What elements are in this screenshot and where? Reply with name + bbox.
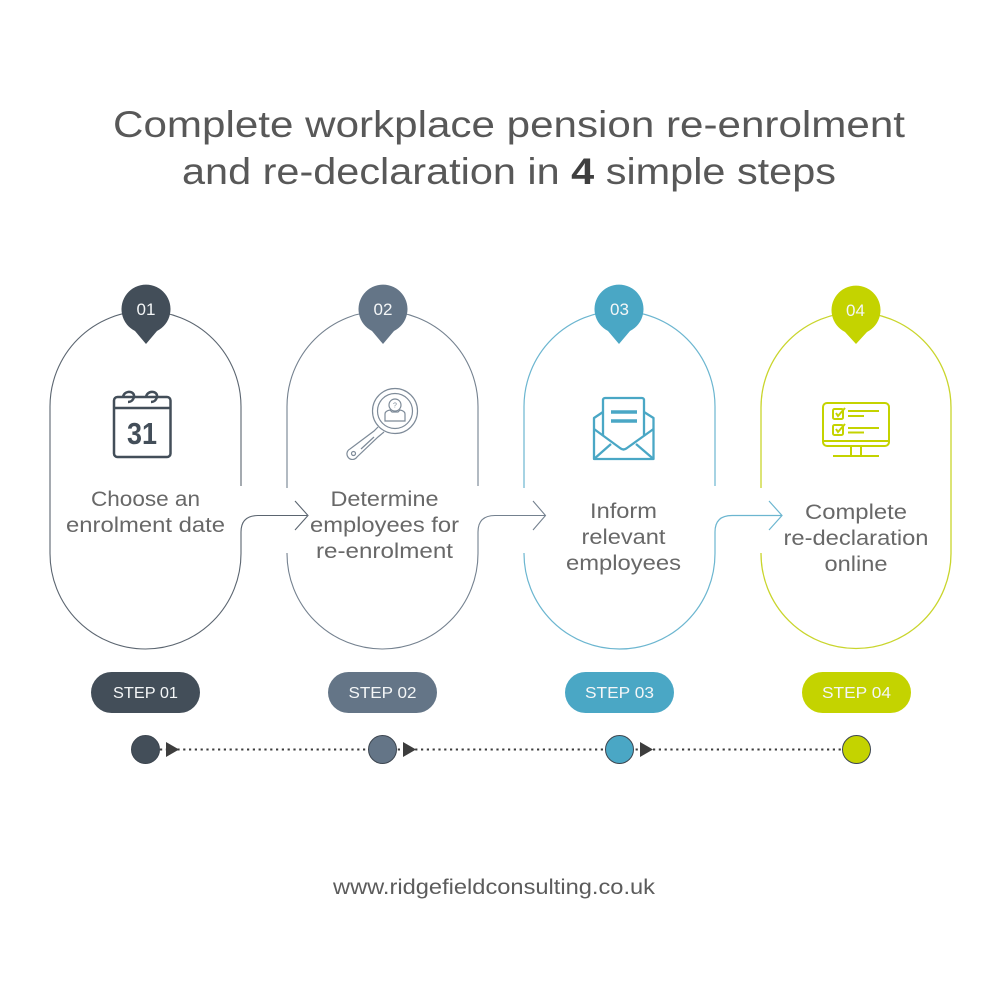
step 3 badge: 03	[610, 300, 629, 319]
step pill 04: STEP 04	[822, 685, 891, 702]
icon: calendar: 31	[127, 416, 157, 451]
timeline node 2	[368, 736, 396, 764]
step 2 label: Determine	[330, 488, 438, 511]
step 1 label	[66, 488, 225, 537]
timeline arrow 2	[403, 742, 416, 757]
step 4 badge: 04	[846, 301, 865, 320]
step 2 badge	[358, 285, 408, 344]
step 4 outline	[761, 313, 951, 648]
step 3 label: relevant	[582, 526, 666, 549]
step 2 label: re-enrolment	[316, 540, 453, 563]
step 4 label	[784, 501, 928, 576]
step pill 01	[91, 672, 200, 713]
step 1 label: enrolment date	[66, 514, 225, 537]
step 2 label	[310, 488, 459, 563]
panel: step 1	[50, 285, 308, 649]
step pill 02	[328, 672, 437, 713]
website url: www.ridgefieldconsulting.co.uk	[332, 876, 656, 899]
step 1 label: Choose an	[91, 488, 200, 511]
step 2 badge: 02	[374, 300, 392, 319]
icon: magnifier with person	[347, 388, 418, 459]
timeline arrow 1	[166, 742, 179, 757]
step 3 badge	[594, 285, 643, 344]
step 3 label: Inform	[590, 500, 657, 523]
timeline node 1	[132, 736, 160, 764]
step pill 04	[802, 672, 911, 713]
icon: envelope with letter	[594, 398, 654, 459]
title: and re-declaration in 4 simple steps	[182, 151, 836, 192]
step pill 02: STEP 02	[348, 685, 416, 702]
panel: step 4	[761, 286, 951, 648]
step 4 badge	[831, 286, 880, 344]
step pill 03: STEP 03	[585, 685, 654, 702]
step 4 label: re-declaration	[784, 527, 928, 550]
timeline arrow 3	[640, 742, 653, 757]
timeline node 4	[842, 736, 870, 764]
step pill 01: STEP 01	[113, 685, 178, 702]
step 2 label: employees for	[310, 514, 459, 537]
title: Complete workplace pension re-enrolment	[113, 104, 906, 145]
step 3 label	[566, 500, 681, 575]
step pill 03	[565, 672, 674, 713]
timeline	[132, 736, 870, 764]
step 3 outline and arrow	[524, 311, 782, 649]
panel: step 2	[287, 285, 546, 649]
step 1 outline and arrow	[50, 311, 308, 649]
timeline node 3	[606, 736, 634, 764]
icon: monitor with checklist	[823, 403, 889, 456]
step 4 label: Complete	[805, 501, 907, 524]
step 2 outline and arrow	[287, 311, 546, 649]
step 4 label: online	[824, 553, 888, 576]
step 1 badge: 01	[137, 300, 155, 319]
step 1 badge	[122, 285, 171, 344]
panel: step 3	[524, 285, 782, 649]
title	[113, 104, 906, 192]
icon: calendar	[114, 392, 170, 457]
step 3 label: employees	[566, 552, 681, 575]
icon: magnifier with person: ?	[393, 402, 397, 410]
